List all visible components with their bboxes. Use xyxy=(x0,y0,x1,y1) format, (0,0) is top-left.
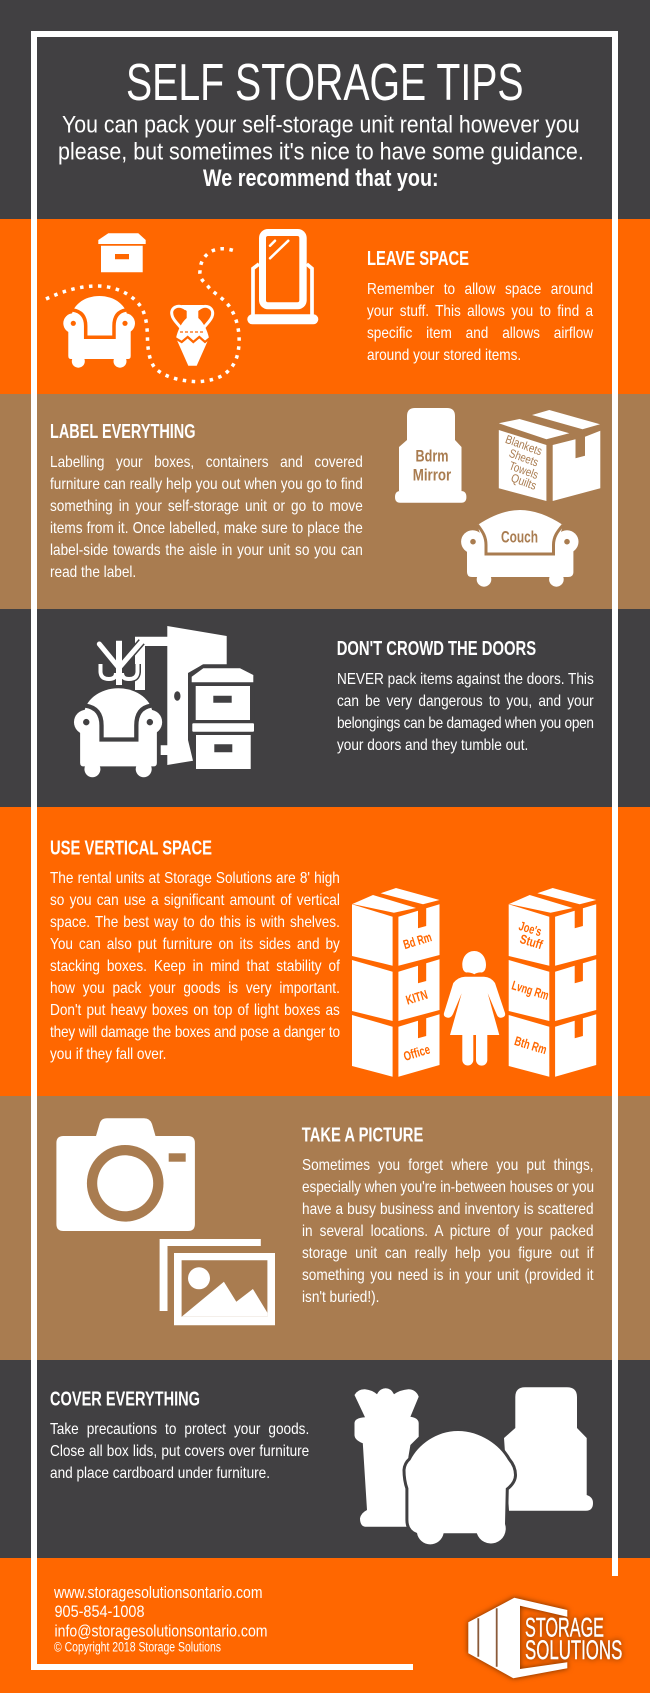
icon: hat rack xyxy=(99,641,142,685)
icon: right box stack: Bth Rm xyxy=(513,1033,549,1057)
text: cover everything: Take precautions to protect your goods. xyxy=(50,1421,309,1438)
icon: labelled couch xyxy=(461,510,578,587)
text: don't crowd the doors: your doors and they tumble out. xyxy=(337,737,528,754)
icon: left box stack: KITN xyxy=(404,987,429,1008)
intro text: please, but sometimes it's nice to have some guidance. xyxy=(58,138,584,165)
icon: covered mirror xyxy=(504,1387,593,1511)
text: use vertical space: how you pack your goods is very important. xyxy=(50,980,340,997)
contact details: info@storagesolutionsontario.com xyxy=(54,1622,268,1640)
text: take a picture: something you need is in your unit (provided it xyxy=(302,1267,593,1284)
text: label everything: something in your self-storage unit or go to move xyxy=(50,498,363,514)
text: use vertical space: You can also put furniture on its sides and by xyxy=(50,936,340,953)
dotted path xyxy=(46,249,239,382)
heading: don't crowd the doors: DON'T CROWD THE DOORS xyxy=(337,638,536,660)
icon: labelled box xyxy=(499,410,600,501)
text: label everything: read the label. xyxy=(50,564,136,580)
heading: use vertical space: USE VERTICAL SPACE xyxy=(50,837,212,859)
icon: labelled mirror xyxy=(395,408,466,503)
text: take a picture: Sometimes you forget where you put things, xyxy=(302,1157,593,1174)
contact details xyxy=(53,1584,268,1655)
text: cover everything: Close all box lids, put covers over furniture xyxy=(50,1443,309,1460)
icon: right box stack xyxy=(509,888,596,1077)
intro text: You can pack your self-storage unit rental however you xyxy=(62,112,580,139)
icon: photos xyxy=(160,1239,275,1325)
icon: left box stack xyxy=(352,888,440,1077)
icon: right box stack: Stuff xyxy=(518,931,545,952)
text: use vertical space: space. The best way to do this is with shelves. xyxy=(50,914,340,931)
panel: header xyxy=(0,0,650,219)
text: use vertical space xyxy=(50,870,340,1063)
panel: take a picture xyxy=(0,1096,650,1360)
icon: labelled box: Quilts xyxy=(509,471,538,493)
icon: standing mirror xyxy=(247,229,318,324)
text: don't crowd the doors: belongings can be damaged when you open xyxy=(337,715,593,732)
text: use vertical space: you if they fall over. xyxy=(50,1046,166,1063)
text: use vertical space: they will damage the boxes and pose a danger to xyxy=(50,1024,340,1041)
text: leave space xyxy=(367,281,594,364)
icon: right box stack: Joe's xyxy=(517,918,544,939)
intro text: We recommend that you: xyxy=(203,165,439,192)
contact details: © Copyright 2018 Storage Solutions xyxy=(54,1640,221,1655)
text: take a picture: storage unit can really help you figure out if xyxy=(302,1245,593,1262)
icon: covered armchair xyxy=(406,1431,514,1544)
text: take a picture: in several locations. A picture of your packed xyxy=(302,1223,593,1240)
heading: take a picture: TAKE A PICTURE xyxy=(302,1124,423,1146)
text: use vertical space: stacking boxes. Keep in mind that stability of xyxy=(50,958,340,975)
icon: labelled box: Blankets xyxy=(504,432,544,458)
contact details: www.storagesolutionsontario.com xyxy=(53,1584,263,1602)
panel: use vertical space xyxy=(0,807,650,1096)
intro text xyxy=(58,112,584,192)
icon: labelled mirror: Bdrm xyxy=(416,447,448,466)
panel: leave space xyxy=(0,219,650,394)
icon: vase xyxy=(172,305,213,366)
icon: left box stack: Bd Rm xyxy=(401,929,433,952)
icon: labelled box: Towels xyxy=(507,459,540,482)
text: label everything: label-side towards the aisle in your unit so you can xyxy=(50,542,363,558)
heading: leave space: LEAVE SPACE xyxy=(367,248,469,270)
panel: label everything xyxy=(0,394,650,609)
text: cover everything: and place cardboard under furniture. xyxy=(50,1465,270,1482)
text: leave space: around your stored items. xyxy=(367,347,521,364)
icon: labelled mirror: Mirror xyxy=(413,466,452,485)
text: take a picture: have a busy business and inventory is scattered xyxy=(302,1201,593,1218)
text: label everything: Labelling your boxes, containers and covered xyxy=(50,454,363,470)
icon: camera xyxy=(56,1118,195,1231)
icon: covered hat rack xyxy=(354,1388,419,1527)
text: leave space: specific item and allows airflow xyxy=(367,325,593,342)
icon: armchair xyxy=(74,688,162,777)
panel: cover everything xyxy=(0,1360,650,1558)
icon: woman xyxy=(444,951,505,1066)
text: take a picture: isn't buried!). xyxy=(302,1289,379,1306)
icon: box xyxy=(98,233,146,272)
text: use vertical space: so you can use a significant amount of vertical xyxy=(50,892,340,909)
icon: labelled box: Sheets xyxy=(507,446,540,469)
text: use vertical space: Don't put heavy boxes on top of light boxes as xyxy=(50,1002,340,1019)
text: leave space: your stuff. This allows you to find a xyxy=(367,303,593,320)
text: don't crowd the doors xyxy=(337,671,594,754)
panel: don't crowd the doors xyxy=(0,609,650,807)
text: leave space: Remember to allow space around xyxy=(367,281,593,298)
icon: stacked boxes xyxy=(189,668,255,771)
text: label everything xyxy=(50,454,363,580)
text: label everything: furniture can really help you out when you go to find xyxy=(50,476,363,492)
icon: labelled couch: Couch xyxy=(501,528,538,547)
heading: label everything: LABEL EVERYTHING xyxy=(50,421,196,443)
title: SELF STORAGE TIPS xyxy=(126,54,524,112)
icon: right box stack: Lvng Rm xyxy=(510,977,551,1003)
icon: door xyxy=(135,626,227,765)
text: use vertical space: The rental units at Storage Solutions are 8' high xyxy=(50,870,340,887)
icon: left box stack: Office xyxy=(402,1042,432,1064)
text: take a picture: especially when you're in-between houses or you xyxy=(302,1179,594,1196)
text: don't crowd the doors: NEVER pack items against the doors. This xyxy=(337,671,593,688)
text: don't crowd the doors: can be very dangerous to you, and your xyxy=(337,693,593,710)
heading: cover everything: COVER EVERYTHING xyxy=(50,1388,200,1410)
icon: armchair xyxy=(63,296,135,368)
logo: storage solutions xyxy=(468,1598,622,1678)
text: label everything: items from it. Once labelled, make sure to place the xyxy=(50,520,363,536)
text: cover everything xyxy=(50,1421,309,1482)
contact details: 905-854-1008 xyxy=(54,1603,144,1621)
panel: footer xyxy=(0,1558,650,1693)
text: take a picture xyxy=(302,1157,594,1306)
